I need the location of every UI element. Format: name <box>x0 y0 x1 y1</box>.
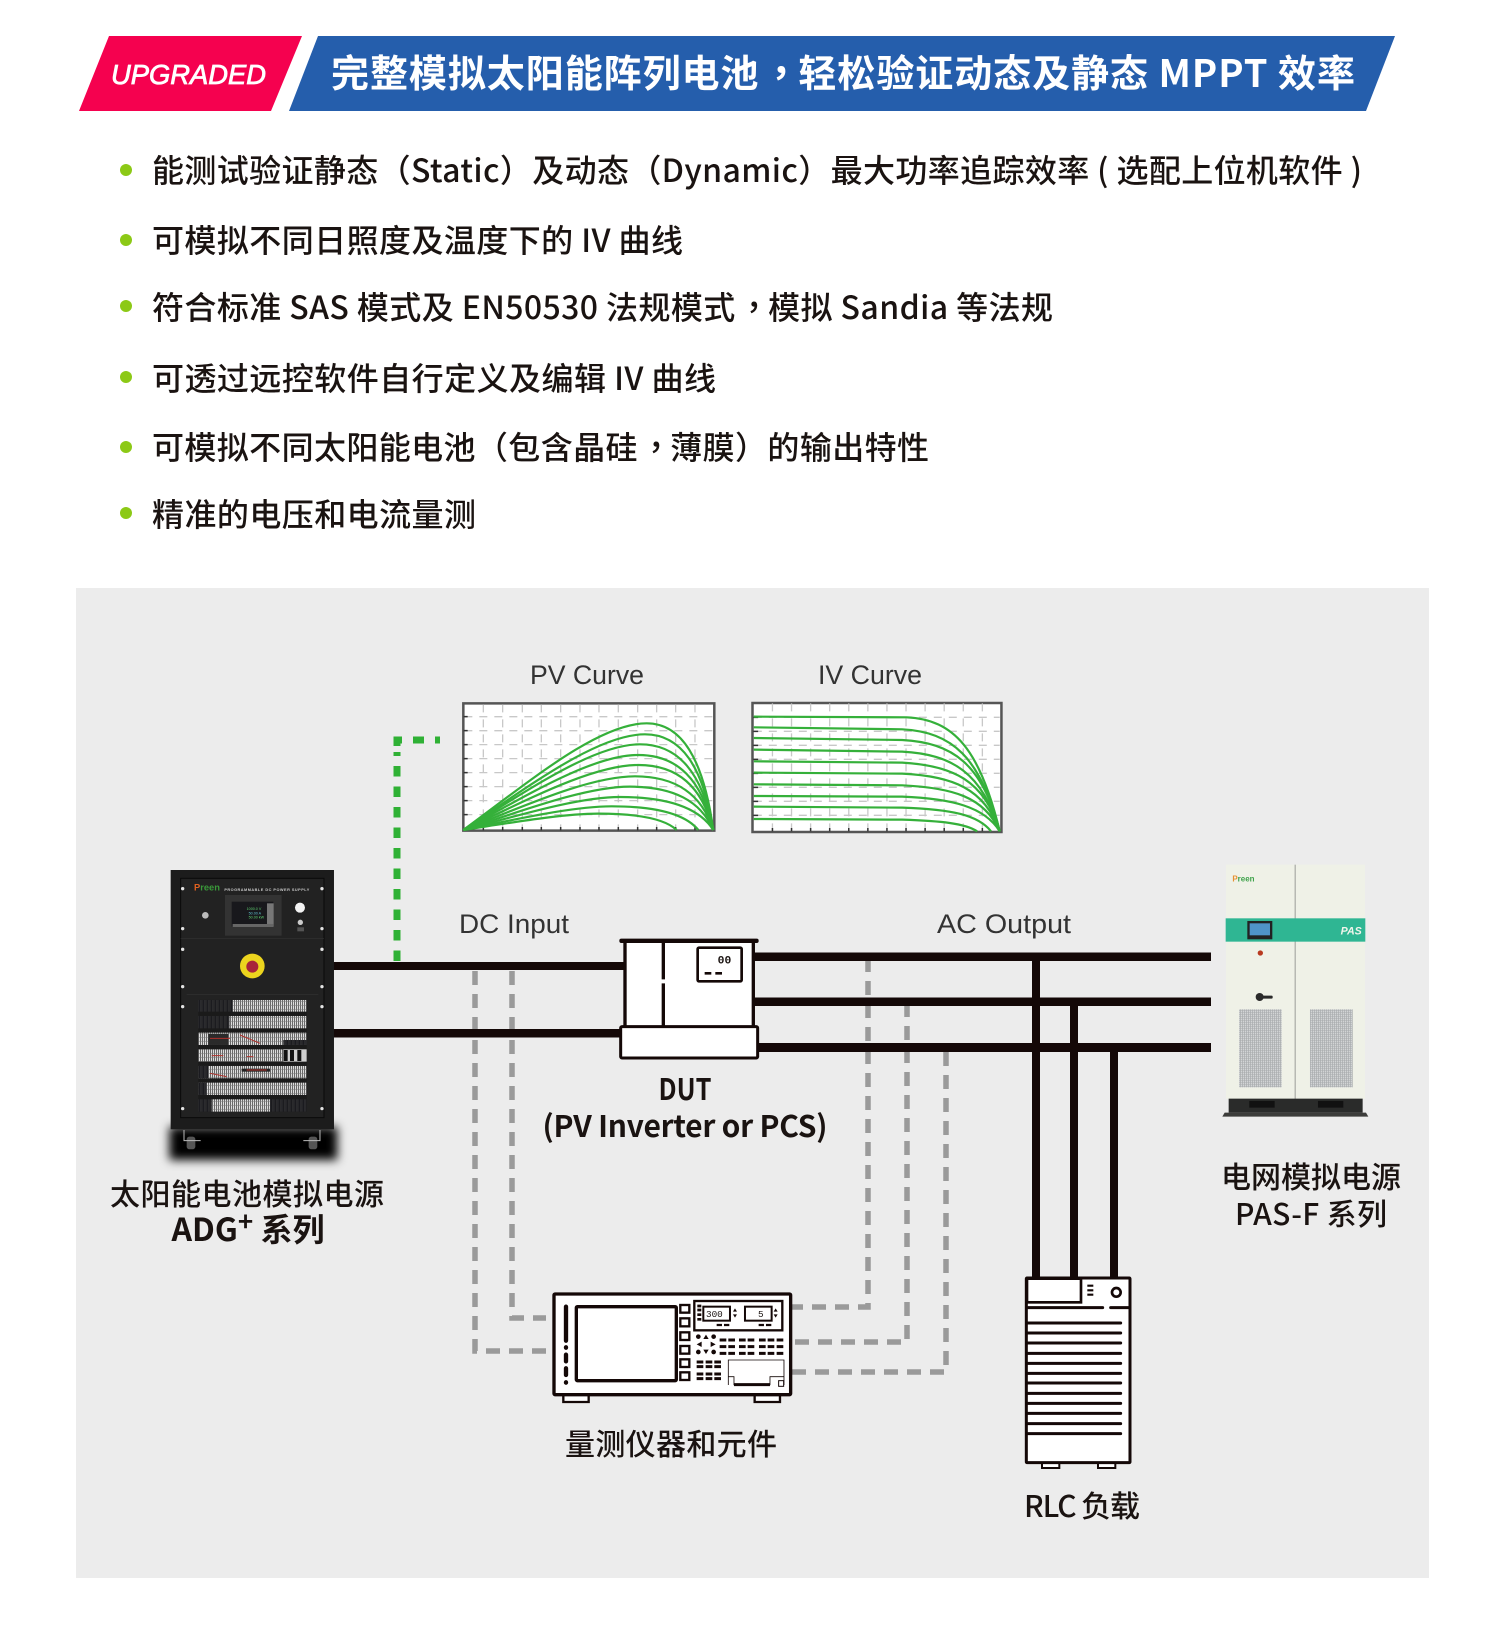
connector: green dashed signal line <box>394 740 440 961</box>
badge: UPGRADED <box>79 36 302 111</box>
bullet 3 <box>120 273 1053 329</box>
casters <box>184 1130 320 1149</box>
icon: DUT inverter <box>619 939 759 1058</box>
bullet 3: ， <box>746 273 778 319</box>
direction pad <box>696 1334 716 1354</box>
label: grid simulator name: 电网模拟电源 <box>1221 1153 1401 1197</box>
knobs <box>202 903 305 931</box>
control screen <box>225 895 282 936</box>
side buttons <box>680 1305 689 1380</box>
logo and model text: PROGRAMMABLE DC POWER SUPPLY <box>224 888 310 892</box>
connectors: gray dashed measurement lines <box>475 958 946 1372</box>
logo and model text <box>194 883 310 893</box>
bullet 4: 可透过远控软件自行定义及编辑 IV 曲线 <box>152 354 716 400</box>
emergency stop button <box>240 954 265 978</box>
touch screen <box>1247 921 1272 939</box>
title banner: ， <box>770 31 808 86</box>
cabinet <box>1026 1278 1130 1463</box>
device: PAS-F grid simulator cabinet <box>1222 865 1368 1117</box>
emergency button <box>1258 950 1263 956</box>
feet <box>563 1395 780 1402</box>
device: ADG+ solar array simulator cabinet <box>169 870 337 1160</box>
bullet 1: 能测试验证静态（Static）及动态（Dynamic）最大功率追踪效率 ( 选配上位机软件 ) <box>152 146 1362 192</box>
label: IV Curve: IV Curve <box>818 660 922 690</box>
label: ADG+ series: + <box>238 1202 253 1239</box>
label: PV Curve: PV Curve <box>530 660 644 690</box>
bullet 3: 模拟 Sandia 等法规 <box>768 283 1053 329</box>
title banner <box>289 31 1395 111</box>
connectors: AC black lines <box>752 952 1211 1280</box>
waveform screen <box>576 1307 676 1381</box>
bullet 6: 精准的电压和电流量测 <box>152 490 476 536</box>
cabinet shadow <box>169 1127 337 1160</box>
label: PAS-F series: PAS-F 系列 <box>1235 1190 1387 1234</box>
badge: UPGRADED: UPGRADED <box>111 59 266 90</box>
feature list <box>120 146 1362 536</box>
rotary handle <box>1256 993 1273 1001</box>
readout panel <box>694 1301 782 1330</box>
label: ADG+ series: ADG <box>172 1205 238 1251</box>
icon: RLC load <box>1026 1278 1130 1468</box>
title banner: 完整模拟太阳能阵列电池 <box>331 43 759 98</box>
control screen: 50.00 kW <box>249 916 265 920</box>
panel: system diagram background <box>76 588 1429 1578</box>
louvres <box>1028 1323 1121 1434</box>
top panel <box>1027 1279 1128 1308</box>
cabinet body <box>171 870 334 1129</box>
logo and model text: Preen <box>194 883 220 893</box>
label: DC Input: DC Input <box>459 909 570 939</box>
cabinet body <box>1226 865 1365 1099</box>
label: AC Output: AC Output <box>937 909 1072 939</box>
bullet 5: 薄膜）的输出特性 <box>670 423 929 469</box>
label: PV Inverter or PCS: (PV Inverter or PCS) <box>542 1102 828 1146</box>
label: DUT: DUT <box>658 1065 712 1109</box>
bullet 5: ， <box>648 413 680 459</box>
model mark PAS: PAS <box>1341 926 1362 938</box>
instrument body <box>554 1294 791 1395</box>
label: solar simulator name: 太阳能电池模拟电源 <box>110 1170 384 1214</box>
label: ADG+ series: 系列 <box>253 1205 324 1251</box>
connectors: DC black lines <box>328 962 624 1038</box>
label: measurement instruments: 量测仪器和元件 <box>565 1420 777 1464</box>
vent grilles <box>1239 1009 1353 1087</box>
feet <box>1042 1463 1115 1468</box>
key grid <box>697 1340 783 1379</box>
icon: measurement instrument <box>554 1294 791 1402</box>
internal modules <box>198 1000 307 1112</box>
bullet 5 <box>120 413 929 469</box>
label: RLC load: RLC 负载 <box>1024 1482 1140 1526</box>
screws <box>181 887 324 1110</box>
readout panel: 300 <box>706 1309 723 1320</box>
title banner: 轻松验证动态及静态 MPPT 效率 <box>798 43 1355 98</box>
chart: PV curve <box>463 703 714 831</box>
readout panel: 5 <box>758 1309 764 1320</box>
bullet 2: 可模拟不同日照度及温度下的 IV 曲线 <box>152 216 683 262</box>
control screen: 1000.0 V <box>247 907 262 911</box>
left indicator strip <box>559 1307 572 1383</box>
green band <box>1226 918 1365 942</box>
cabinet base <box>1222 1099 1368 1117</box>
logo: Preen <box>1232 875 1255 884</box>
icon: DUT inverter: 00 <box>718 955 731 967</box>
bullet 5: 可模拟不同太阳能电池（包含晶硅 <box>152 423 637 469</box>
bullet 3: 符合标准 SAS 模式及 EN50530 法规模式 <box>152 283 735 329</box>
input port <box>728 1360 784 1386</box>
chart: IV curve <box>752 703 1001 832</box>
control screen: 50.00 A <box>249 912 262 916</box>
